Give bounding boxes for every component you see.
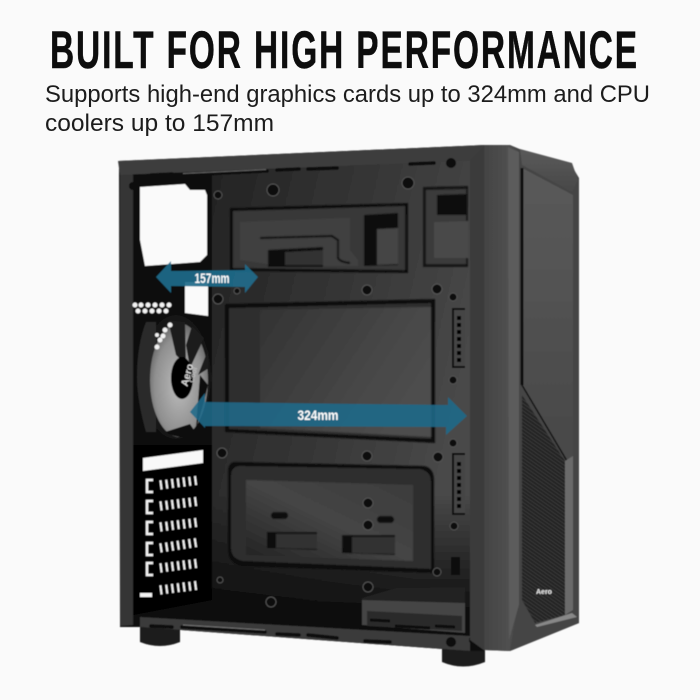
case rear interior	[118, 145, 485, 651]
arrow: 324mm graphics card clearance	[190, 393, 467, 435]
fan hub with logo	[171, 357, 199, 399]
subtitle	[45, 81, 650, 137]
arrow: 157mm CPU cooler clearance: 157mm	[194, 270, 230, 286]
side front panel	[510, 149, 579, 651]
case feet	[140, 625, 485, 666]
motherboard tray	[212, 158, 470, 607]
fan hub with logo: Aero	[180, 363, 196, 388]
arrow: 324mm graphics card clearance: 324mm	[298, 407, 338, 423]
front frame and bezel	[470, 145, 519, 651]
upper panel	[522, 168, 573, 461]
rear fan	[137, 315, 211, 439]
PSU opening	[140, 184, 207, 266]
case silhouette base	[484, 145, 579, 651]
bottom rail	[140, 617, 479, 651]
subtitle: Supports high-end graphics cards up to 324mm and CPU	[45, 81, 650, 108]
bottom PSU shelf	[362, 587, 465, 633]
upper right drive bay	[423, 186, 468, 267]
mesh panel	[522, 395, 565, 623]
middle motherboard panel	[225, 299, 435, 443]
honeycomb holes	[132, 302, 172, 314]
upper fan opening	[185, 282, 208, 316]
PCI expansion slots	[140, 450, 203, 597]
fan hub with logo: Cool	[189, 367, 199, 383]
standoff screws	[213, 177, 482, 607]
arrow: 157mm CPU cooler clearance	[156, 261, 258, 293]
lower motherboard panel	[228, 462, 434, 573]
subtitle: coolers up to 157mm	[45, 110, 274, 137]
ventilation strips	[451, 308, 465, 575]
PC case illustration	[118, 145, 579, 666]
front panel logo: Aero	[536, 589, 552, 596]
upper motherboard cutouts	[230, 203, 408, 273]
left frame	[120, 170, 133, 626]
top rail	[118, 145, 485, 190]
black lower-left bay	[133, 445, 212, 615]
